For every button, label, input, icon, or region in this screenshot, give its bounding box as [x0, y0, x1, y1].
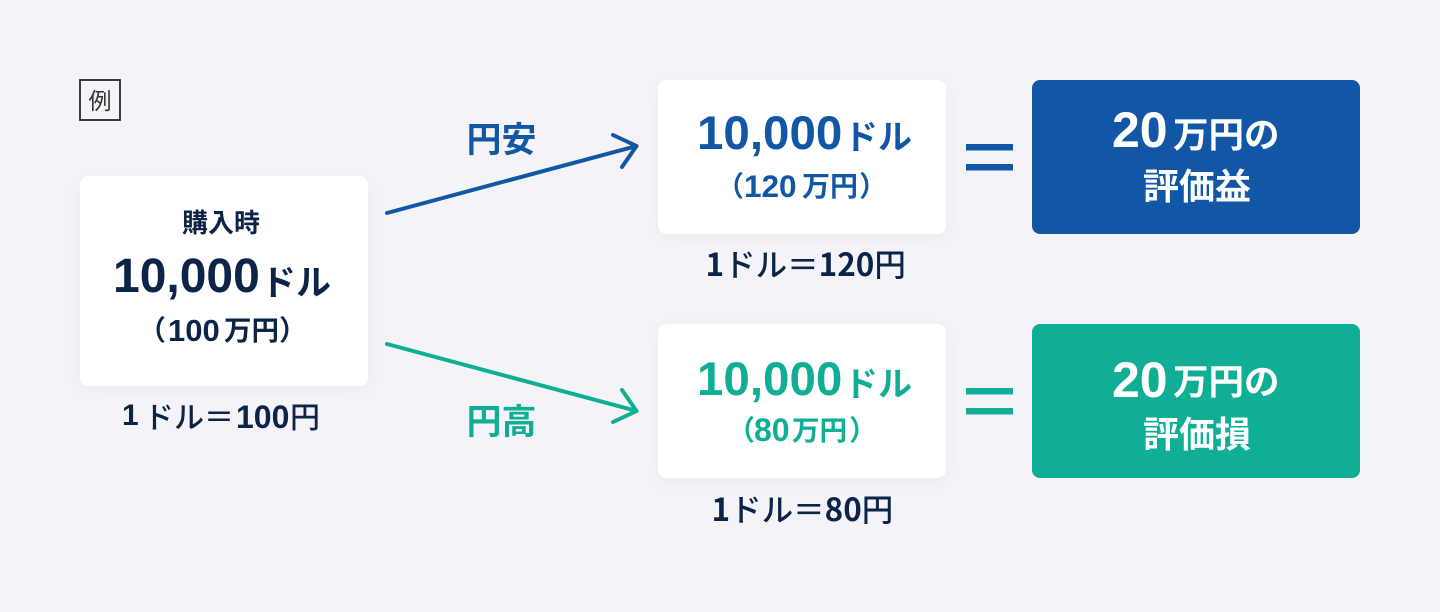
text: 万円	[792, 408, 847, 448]
text: 1	[122, 399, 139, 432]
text: 万円	[802, 165, 858, 205]
amount: 10,000 dollars strong yen	[697, 353, 912, 406]
text: 80	[754, 412, 790, 448]
result: loss: 評価損	[1143, 406, 1251, 458]
amount: 800 thousand yen	[727, 408, 877, 448]
icon: example label	[79, 79, 121, 121]
rate: weak yen exchange rate: 1ドル＝120円	[706, 240, 906, 286]
label: weak yen: 円安	[466, 112, 537, 162]
amount: 1.2 million yen	[716, 165, 887, 205]
label: at purchase heading: 購入時	[182, 202, 260, 240]
label: strong yen: 円高	[466, 394, 537, 445]
text: 20	[1112, 102, 1168, 158]
rate: strong yen exchange rate: 1ドル＝80円	[712, 484, 893, 530]
icon: example label: 例	[88, 82, 112, 116]
amount: one million yen	[138, 308, 307, 348]
result: 200 thousand yen loss	[1112, 352, 1280, 408]
panel: unrealized gain	[1032, 80, 1360, 234]
panel: strong yen value	[658, 324, 946, 478]
text: （	[138, 308, 166, 348]
text: ドル	[844, 110, 912, 158]
panel: weak yen value	[658, 80, 946, 234]
panel: at purchase	[80, 176, 368, 386]
amount: 10,000 dollars at purchase	[113, 250, 331, 306]
text: 100	[236, 399, 289, 435]
icon: equals green	[966, 388, 1013, 414]
panel: unrealized loss	[1032, 324, 1360, 478]
text: 10,000	[697, 353, 842, 406]
text: （	[727, 408, 755, 448]
icon: equals blue	[966, 144, 1013, 170]
text: 万円の	[1173, 354, 1280, 405]
arrow: strong yen	[384, 342, 639, 424]
text: 万円	[224, 308, 279, 348]
text: 100	[168, 312, 220, 348]
amount: 10,000 dollars weak yen	[697, 107, 912, 160]
text: ドル＝	[144, 393, 234, 437]
text: ）	[859, 165, 887, 205]
text: 10,000	[697, 107, 842, 160]
text: （	[716, 165, 744, 205]
result: 200 thousand yen gain	[1112, 102, 1280, 158]
text: 120	[744, 168, 797, 204]
text: ）	[849, 408, 877, 448]
text: 万円の	[1173, 107, 1280, 158]
text: 10,000	[113, 250, 260, 303]
rate: purchase exchange rate	[122, 393, 320, 437]
result: gain: 評価益	[1143, 158, 1251, 210]
text: 20	[1112, 352, 1168, 408]
text: ）	[279, 308, 307, 348]
arrow: weak yen	[384, 132, 639, 215]
text: ドル	[261, 254, 331, 306]
text: ドル	[844, 356, 912, 406]
text: 円	[290, 393, 320, 437]
